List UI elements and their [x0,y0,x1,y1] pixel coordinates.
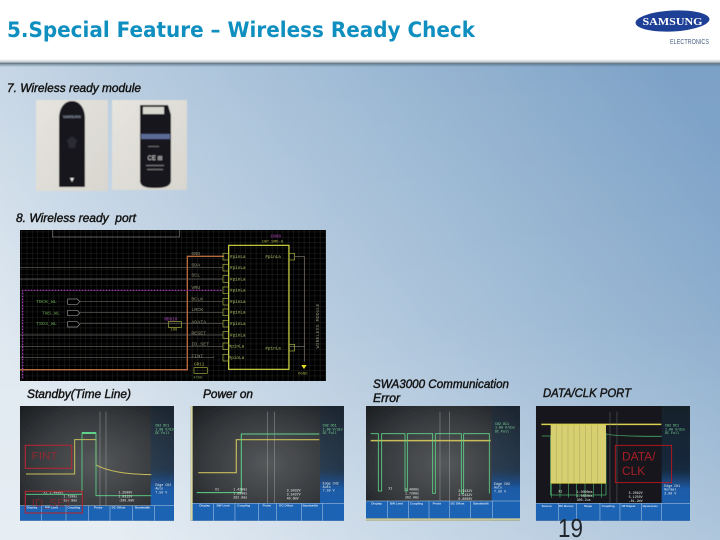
pin labels: #pinLa [229,345,245,350]
part labels [262,235,321,377]
scope photo: standby: DC Full [155,431,169,435]
scope photo: DATA/CLK port [536,406,690,521]
title: 5.Special Feature – Wireless Ready Check [7,18,476,42]
pin labels: #pinLa [265,346,281,351]
heading: SWA3000 communication error: SWA3000 Communication [373,377,509,391]
header band [0,0,720,67]
scope photo: power on: Probe [263,503,271,507]
callout: FINT: FINT [32,451,58,463]
pin labels: #pinLa [265,255,281,260]
scope photo: DATA/CLK port: 5.1250V [629,495,643,499]
callout: FINT [25,445,72,468]
resistors: 100 [171,328,177,332]
scope photo: DATA/CLK port: X1 [558,489,562,493]
scope photo: SWA3000 communication error: 262.0ms [405,496,419,500]
scope photo: DATA/CLK port: Source [542,504,552,508]
scope photo: power on: 7.50 V [323,489,335,493]
heading: SWA3000 communication error [373,377,509,405]
signal ports: TSD3_WL [36,321,57,327]
green trace [371,434,489,493]
scope photo: standby: X1 1.4000s [43,491,63,495]
scope photo: power on: Coupling [237,503,250,507]
signal ports: TBCK_WL [36,299,57,305]
callout: DATA/CLK: CLK [622,464,645,478]
scope photo: SWA3000 communication error: DC Full [495,429,509,433]
scope photo: SWA3000 communication error: 1.7200s [405,492,419,496]
scope photo: DATA/CLK port: Slope [584,504,592,508]
scope photo: SWA3000 communication error: CH2 DC1 [495,422,509,426]
scope photo: DATA/CLK port: 3.00 V [664,491,676,495]
scope photo: SWA3000 communication error: 1.00 V/div [495,426,515,430]
pin boxes [223,253,295,361]
net names: SCL [191,272,200,278]
scope photo: power on: Auto [323,485,331,489]
yellow trace [26,440,151,475]
scope photo: power on: Display [199,503,210,507]
scope photo: power on: 40.6mV [287,496,299,500]
green trace [542,434,662,495]
part labels: WIRELESS MODULE [315,303,321,348]
net names: VRU [191,285,200,291]
resistors: GR11 [194,363,205,368]
net names: RESET [191,331,206,337]
scope photo: SWA3000 communication error: Auto [494,486,502,490]
scope photo: DATA/CLK port: 305.2us [577,498,591,502]
scope photo: DATA/CLK port: Coupling [602,504,615,508]
scope photo: power on: 1.00 V/div [323,427,343,431]
scope photo: standby: DC Offset [112,506,125,510]
net names: BCLK [191,297,203,303]
scope photo: SWA3000 communication error [366,406,520,521]
heading: wireless ready port: 8. Wireless ready port [16,211,137,225]
scope photo: SWA3000 communication error: 7.50 V [494,489,506,493]
scope photo: DATA/CLK port: Hysteresis [643,504,658,508]
resistors: 4700 [193,377,202,381]
pin labels: #pinLa [230,333,246,338]
scope photo: standby: 1.00 V/div [155,427,175,431]
scope photo: SWA3000 communication error: Coupling [410,501,423,505]
heading: standby time line: Standby(Time Line) [27,387,131,401]
scope photo: power on: BW Limit [217,503,230,507]
scope photo: SWA3000 communication error: Edge CH2 [494,482,510,486]
scope photo: power on: CH2 DC1 [323,424,337,428]
scope photo: standby: 1.7200s [63,495,77,499]
photo: module back [112,100,187,190]
net names: ADATA [191,320,206,326]
scope photo: SWA3000 communication error: Display [371,501,382,505]
scope photo: standby [20,406,175,521]
wires [20,256,305,362]
scope photo: SWA3000 communication error: 0.0000V [458,497,472,501]
pin labels: #pinLa [230,322,246,327]
scope photo: SWA3000 communication error: 3.5432V [458,489,472,493]
scope photo: standby: 1.2500V [118,491,132,495]
scope photo: DATA/CLK port: 1.0000ms [577,490,593,494]
photo: module front: SAMSUNG [63,115,81,119]
signal ports [36,299,80,327]
scope photo: standby: BW Limit [45,506,58,510]
callout: ID_SET: ID_SET [32,497,72,509]
scope photo: standby: Probe [94,506,103,510]
pin labels: #pinLa [230,266,246,271]
scope photo: standby: Edge CH2 [155,483,171,487]
scope photo: DATA/CLK port: DC Full [665,431,679,435]
signal ports: TWS_WL [42,310,60,316]
green trace [197,434,319,493]
scope photo: standby: 7.50 V [155,490,167,494]
pin labels: #pinLa [230,255,246,260]
scope photo: power on: 1.4200s [233,488,247,492]
scope photo: SWA3000 communication error: Probe [433,501,441,505]
scope photo: DATA/CLK port: HF Reject [622,504,635,508]
icon: Samsung Electronics logo: SAMSUNG [642,16,703,28]
scope photo: DATA/CLK port: DC Bonus [559,504,574,508]
pin labels: #pinLa [230,289,246,294]
pin labels: #pinLa [230,277,246,282]
callout: DATA/CLK: DATA/ [622,449,656,463]
photo: module front [36,100,108,191]
scope photo: standby: -200.0mV [118,499,134,503]
scope photo: SWA3000 communication error: Bandwidth [473,501,489,505]
heading: SWA3000 communication error: Error [373,391,401,405]
pin labels: #pinLa [229,356,245,361]
scope photo: standby: CH2 DC1 [155,424,169,428]
net names: SDA [191,262,200,268]
scope photo: power on: 262.0ms [233,496,247,500]
icon: Samsung Electronics logo [635,9,710,46]
scope photo: power on: 1.6800s [233,492,247,496]
part labels: CN88 [271,235,281,240]
icon: Samsung Electronics logo: ELECTRONICS [670,39,709,46]
resistors [164,317,207,381]
scope photo: standby: 320.0ms [63,499,77,503]
scope photo: DATA/CLK port: 1.00 V/div [665,427,685,431]
net names: GND [191,251,200,257]
scope photo: DATA/CLK port: CH2 DC1 [665,424,679,428]
scope photo: power on: X1 [215,488,219,492]
scope photo: DATA/CLK port: Normal [664,488,676,492]
green trace [26,433,151,496]
yellow trace [198,440,319,473]
heading: DATA/CLK port: DATA/CLK PORT [543,386,633,400]
pin labels [229,255,281,361]
scope photo: power on: DC Offset [279,503,293,507]
power nets [20,256,224,370]
scope photo: DATA/CLK port: Edge CH1 [664,484,680,488]
scope photo: standby: Coupling [67,506,80,510]
net names: ID_SET [191,342,209,348]
scope photo: power on: Bandwidth [303,503,318,507]
scope photo: standby: Display [27,506,38,510]
part labels: 10P_SMD-A [262,240,284,244]
scope photo: DATA/CLK port: 5.2062V [629,491,643,495]
scope photo: DATA/CLK port: 1.0850ms [577,494,593,498]
yellow data burst [551,424,606,483]
connector outline [229,245,289,369]
heading: power on: Power on [203,387,253,401]
resistors: MD610 [164,317,178,322]
scope photo: power on: Edge CH2 [323,481,339,485]
scope photo: SWA3000 communication error: X1 [388,487,392,491]
scope photo: DATA/CLK port: -81.2mV [629,499,643,503]
scope photo: standby: Auto [155,487,163,491]
schematic: wireless ready port [20,230,326,381]
photo: module back: CE ⊠ [147,156,163,162]
net names: LRCK [191,307,203,313]
scope photo: power on: 3.5437V [287,492,301,496]
scope photo: SWA3000 communication error: 1.4000s [405,488,419,492]
scope photo: power on: 3.5032V [287,488,301,492]
part labels: DGND [298,373,308,377]
net names: FINT [191,354,203,360]
heading: wireless ready module: 7. Wireless ready module [7,81,141,95]
callout: DATA/CLK [615,445,672,483]
scope photo: SWA3000 communication error: 3.5432V [458,493,472,497]
scope photo: power on: DC Full [323,431,337,435]
pin labels: #pinLa [230,311,246,316]
callout: ID_SET [25,491,82,513]
pin labels: #pinLa [230,300,246,305]
net names [191,251,209,360]
scope photo: standby: Bandwidth [135,506,150,510]
scope photo: SWA3000 communication error: BW Limit [390,501,403,505]
scope photo: SWA3000 communication error: DC Offset [451,501,464,505]
scope photo: standby: 1.0312V [118,495,132,499]
scope photo: power on [191,406,344,521]
yellow trace [371,438,491,443]
